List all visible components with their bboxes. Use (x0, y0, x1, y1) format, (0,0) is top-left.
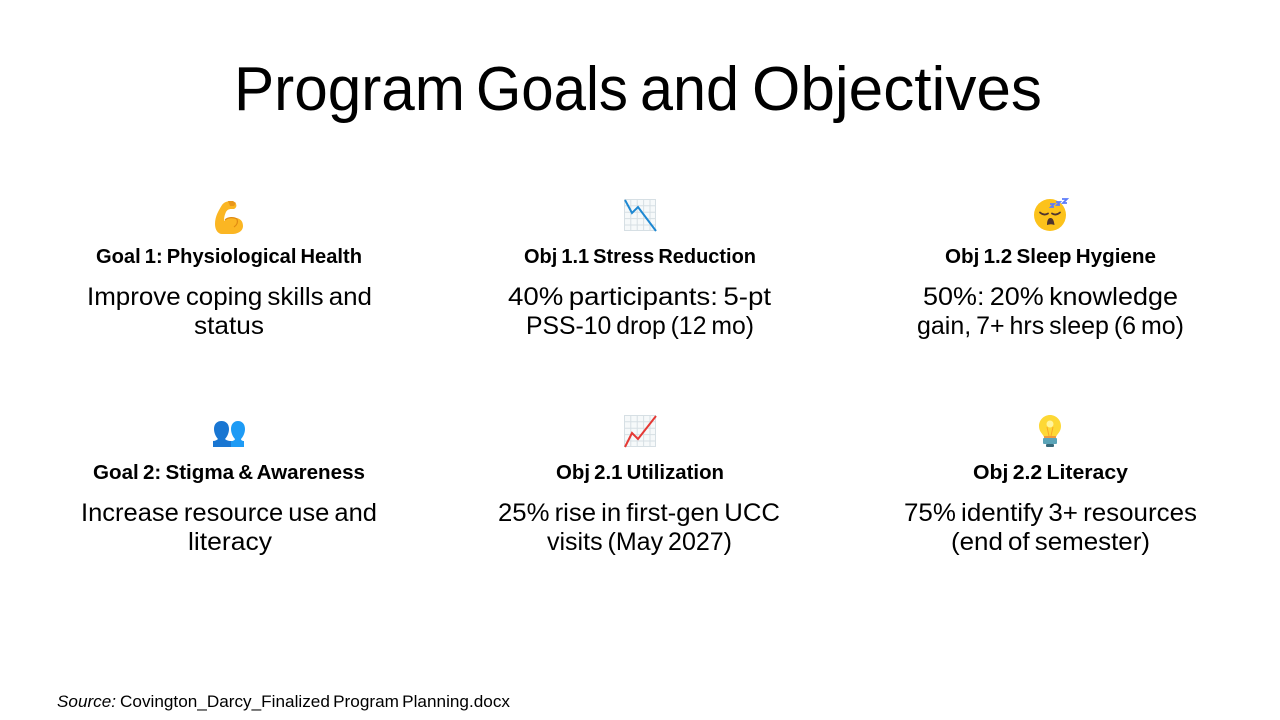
heading: objective 2.2: Obj 2.2 Literacy (973, 462, 1129, 484)
icon: sleeping face (1034, 199, 1067, 231)
title: Objectives (752, 55, 1042, 124)
text: goal 1 description (87, 283, 372, 340)
panel: objective 1.1 (508, 199, 771, 340)
text: objective 2.1 description: 25% rise in first-gen UCC (498, 499, 780, 527)
panel: objective 1.2 (917, 199, 1184, 340)
text: objective 2.2 description: 75% identify 3+ resources (904, 499, 1197, 527)
icon: chart increasing (624, 415, 656, 447)
icon: light bulb (1039, 415, 1061, 447)
text: objective 1.1 description: PSS-10 drop (12 mo) (526, 312, 754, 340)
source note: Source: (57, 692, 116, 711)
icon: chart decreasing (624, 199, 656, 231)
panel: goal 2 (81, 421, 377, 556)
heading: objective 1.1: Obj 1.1 Stress Reduction (524, 246, 756, 268)
text: objective 1.2 description: gain, 7+ hrs sleep (6 mo) (917, 312, 1184, 340)
text: goal 1 description: Improve coping skills and (87, 283, 372, 311)
heading: goal 2: Goal 2: Stigma & Awareness (93, 462, 365, 484)
icon: two people silhouettes (213, 421, 245, 447)
title (234, 55, 1042, 124)
icon: flexed biceps (215, 201, 243, 234)
panel: goal 1 (87, 201, 372, 340)
text: goal 1 description: status (194, 312, 264, 340)
source note: Covington_Darcy_Finalized Program Planning.docx (120, 692, 510, 711)
text: objective 2.1 description (498, 499, 780, 556)
text: objective 2.2 description: (end of semester) (951, 528, 1150, 556)
title: Program (234, 55, 465, 124)
text: objective 2.2 description (904, 499, 1197, 556)
panel: objective 2.2 (904, 415, 1197, 556)
heading: goal 1: Goal 1: Physiological Health (96, 246, 362, 268)
text: goal 2 description: Increase resource use and (81, 499, 377, 527)
text: goal 2 description (81, 499, 377, 556)
text: objective 2.1 description: visits (May 2027) (547, 528, 732, 556)
text: objective 1.2 description (917, 283, 1184, 340)
text: objective 1.2 description: 50%: 20% knowledge (923, 283, 1178, 311)
text: objective 1.1 description (508, 283, 771, 340)
panel: objective 2.1 (498, 415, 780, 556)
title: and (640, 55, 739, 124)
heading: objective 1.2: Obj 1.2 Sleep Hygiene (945, 246, 1156, 268)
heading: objective 2.1: Obj 2.1 Utilization (556, 462, 724, 484)
text: goal 2 description: literacy (188, 528, 273, 556)
text: objective 1.1 description: 40% participants: 5-pt (508, 283, 771, 311)
title: Goals (476, 55, 628, 124)
